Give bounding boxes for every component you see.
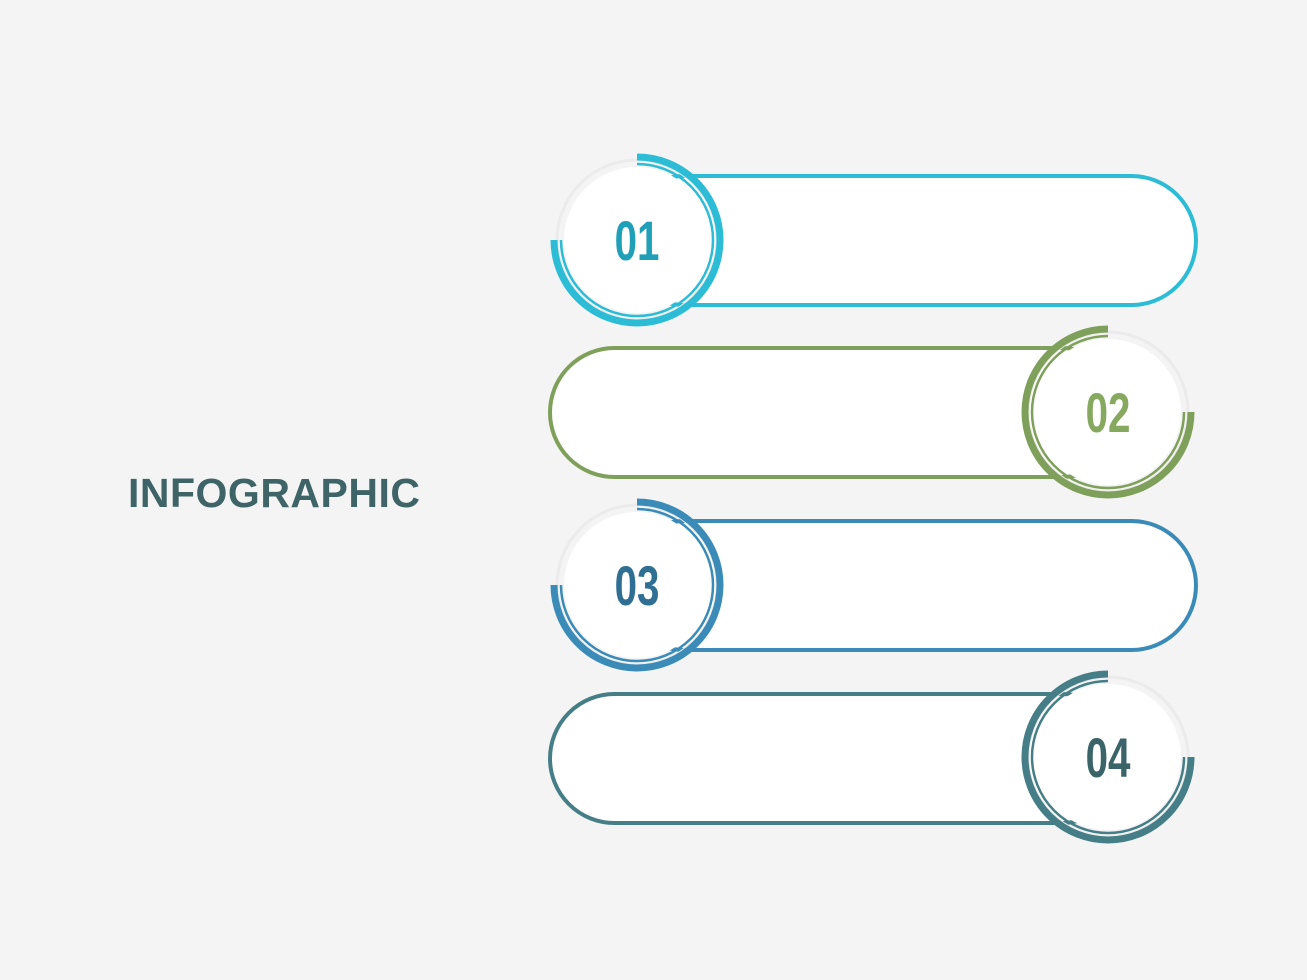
pill 01 xyxy=(620,176,1196,305)
badge 01: 01 xyxy=(615,211,659,273)
panel: step 02 xyxy=(550,329,1191,495)
badge 04: 04 xyxy=(1086,728,1130,790)
badge 04 xyxy=(1025,674,1191,840)
pill 04 xyxy=(550,694,1126,823)
panel: step 03 xyxy=(554,502,1196,668)
panel: step 01 xyxy=(554,157,1196,323)
pill 02 xyxy=(550,348,1126,477)
panel: step 04 xyxy=(550,674,1191,840)
badge 02 xyxy=(1025,329,1191,495)
badge 03: 03 xyxy=(615,556,659,618)
title: INFOGRAPHIC xyxy=(128,470,420,516)
badge 03 xyxy=(554,502,720,668)
pill 03 xyxy=(620,521,1196,650)
badge 01 xyxy=(554,157,720,323)
badge 02: 02 xyxy=(1086,383,1130,445)
